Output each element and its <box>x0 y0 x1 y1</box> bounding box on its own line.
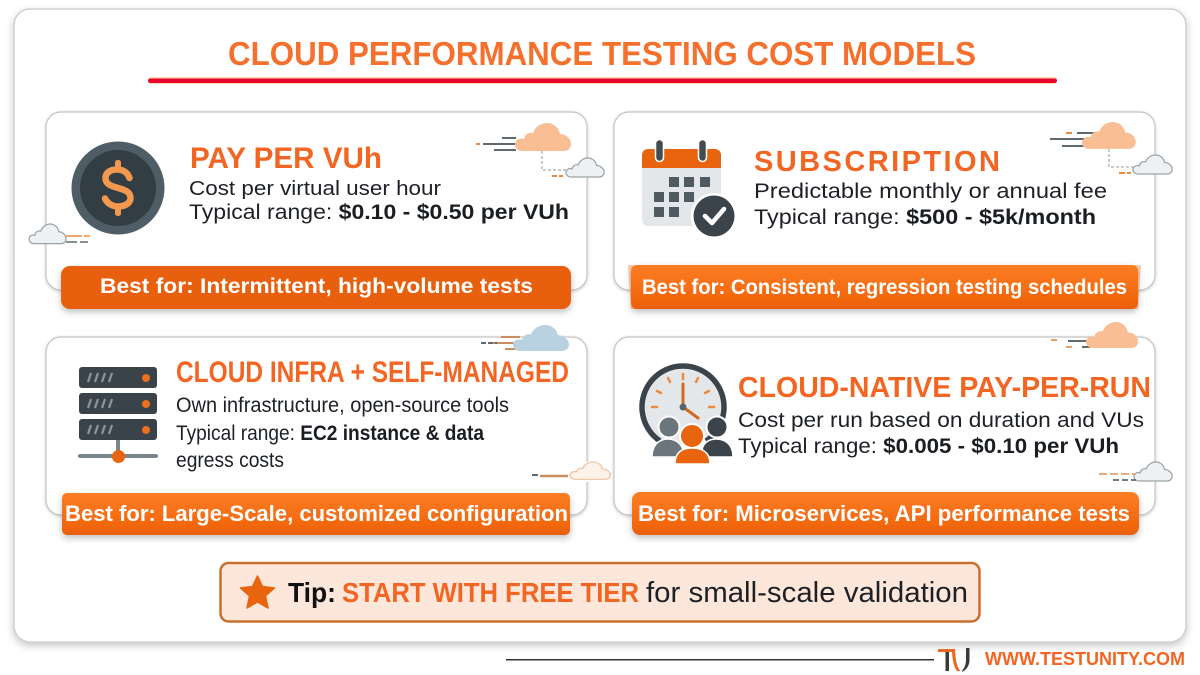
best-for banner <box>628 265 1141 309</box>
icon: cloud top right <box>1051 322 1138 348</box>
best-for banner <box>61 266 571 309</box>
card background <box>614 112 1155 290</box>
icon: dollar coin <box>72 142 164 234</box>
icon: server stack <box>78 367 158 463</box>
best-for banner <box>632 492 1139 535</box>
best-for banner: Best for: Large-Scale, customized configuration <box>65 501 568 526</box>
tip label: Tip: <box>288 577 336 608</box>
typical range: Typical range: $0.10 - $0.50 per VUh <box>189 201 569 224</box>
description: Own infrastructure, open-source tools <box>176 394 509 417</box>
footer rule <box>506 659 934 660</box>
panel: pay per VUh <box>29 112 604 309</box>
heading: SUBSCRIPTION <box>754 146 1000 178</box>
icon: calendar with check <box>642 140 737 239</box>
typical range continued: egress costs <box>176 449 284 472</box>
panel: subscription <box>614 112 1172 309</box>
icon: cloud lower right <box>532 462 612 482</box>
heading: PAY PER VUh <box>190 142 382 175</box>
icon: cloud lower right <box>1099 462 1172 481</box>
best-for banner: Best for: Intermittent, high-volume tests <box>100 274 533 298</box>
best-for banner: Best for: Consistent, regression testing schedules <box>642 276 1127 299</box>
card background <box>614 337 1155 515</box>
icon: star <box>240 576 274 608</box>
logo <box>938 648 970 672</box>
website url: WWW.TESTUNITY.COM <box>985 649 1185 669</box>
card background <box>46 112 587 290</box>
panel: cloud infra + self-managed <box>46 325 612 535</box>
best-for banner: Best for: Microservices, API performance tests <box>638 501 1130 526</box>
title underline <box>148 77 1057 84</box>
callout: tip <box>220 563 980 622</box>
card background <box>46 337 587 515</box>
tip text: for small-scale validation <box>646 577 968 609</box>
users group <box>652 416 733 464</box>
typical range: Typical range: $0.005 - $0.10 per VUh <box>738 435 1119 458</box>
description: Cost per run based on duration and VUs <box>738 409 1144 432</box>
tip emphasis: START WITH FREE TIER <box>342 577 639 608</box>
icon: cloud left <box>29 224 90 244</box>
best-for banner <box>62 493 570 535</box>
typical range: Typical range: EC2 instance & data <box>176 422 484 445</box>
panel: cloud-native pay-per-run <box>614 322 1172 535</box>
icon: cloud top right <box>481 325 569 351</box>
icon: clouds top right <box>1050 122 1172 174</box>
description: Cost per virtual user hour <box>189 178 441 200</box>
icon: clock with users <box>642 366 733 464</box>
description: Predictable monthly or annual fee <box>754 180 1107 203</box>
typical range: Typical range: $500 - $5k/month <box>754 206 1096 229</box>
title: CLOUD PERFORMANCE TESTING COST MODELS <box>228 35 976 72</box>
heading: CLOUD-NATIVE PAY-PER-RUN <box>738 372 1151 404</box>
icon: clouds top right <box>476 123 604 177</box>
heading: CLOUD INFRA + SELF-MANAGED <box>176 356 569 389</box>
